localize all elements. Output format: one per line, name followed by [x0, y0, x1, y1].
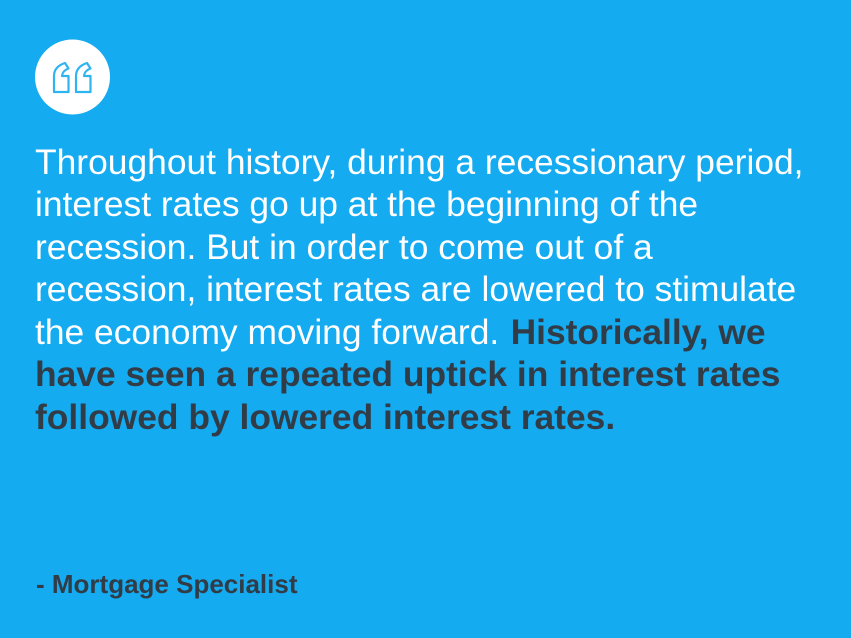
quote text: interest rates go up at the beginning of the — [35, 184, 698, 224]
quote text: the economy moving forward. Historically, we — [35, 312, 766, 352]
quote text: have seen a repeated uptick in interest rates — [35, 354, 780, 394]
attribution: - Mortgage Specialist — [36, 569, 298, 599]
quote text: Throughout history, during a recessionary period, — [35, 142, 804, 182]
icon: quotation mark in white circle — [35, 40, 110, 114]
quote text: recession, interest rates are lowered to stimulate — [35, 269, 796, 309]
quote text: followed by lowered interest rates. — [35, 397, 615, 437]
quote text — [35, 142, 804, 437]
quote text: recession. But in order to come out of a — [35, 227, 653, 267]
